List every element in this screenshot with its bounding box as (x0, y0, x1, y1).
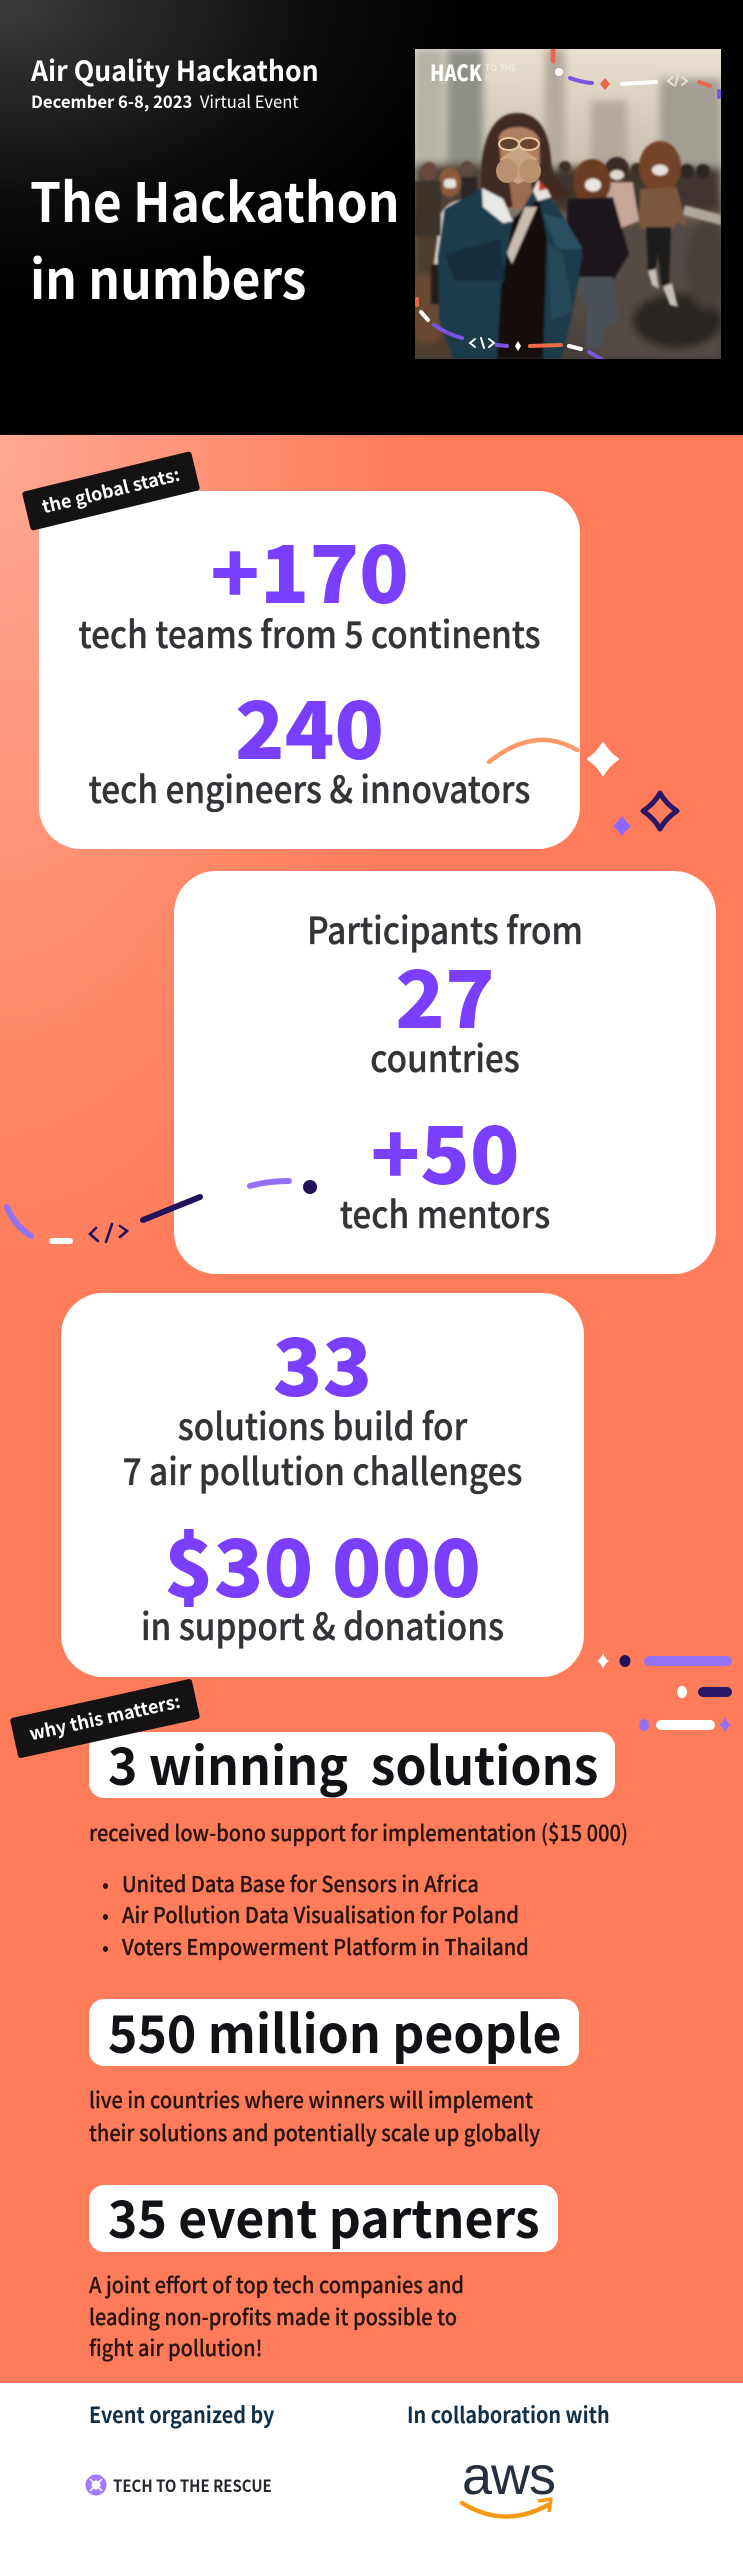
bullet (103, 1914, 108, 1920)
text: joint effort (88, 2268, 464, 2363)
list item: Poland: Air Pollution Data Visualisation for Poland (122, 1898, 519, 1930)
label: support and donations: in support & donations (141, 1597, 504, 1651)
label: tech engineers: tech engineers & innovators (89, 760, 530, 814)
label: solutions built: solutions build for (178, 1397, 467, 1451)
label: collaborator: In collaboration with (407, 2398, 610, 2430)
icon: lifebuoy ring (86, 2474, 106, 2496)
callout: 3 winning solutions (89, 1732, 615, 1798)
stat: 27: 27 (395, 936, 495, 1052)
wordmark: TECH TO THE RESCUE (113, 2473, 272, 2497)
tag: the global stats: the global stats: (39, 461, 182, 519)
main heading (30, 159, 400, 315)
text: where winners implement: live in countries where winners will implement (89, 2083, 533, 2115)
logo: Tech To The Rescue (86, 2473, 272, 2497)
photo logo: RESCUE (485, 73, 518, 83)
callout: 35 event partners (89, 2185, 558, 2252)
panel: global stats card 1 (39, 491, 580, 849)
icon: dashes near card 3 (597, 1653, 732, 1733)
coral stats background (0, 435, 743, 2383)
icon: dashes and code glyph by card 2 (7, 1180, 317, 1242)
callout: 550 million people (89, 1999, 579, 2066)
stat: 33: 33 (273, 1304, 372, 1420)
label: challenges: 7 air pollution challenges (123, 1442, 522, 1496)
label: countries: countries (370, 1029, 520, 1083)
photo logo: TO THE (485, 63, 517, 73)
event date and format: December 6-8, 2023 Virtual Event (31, 88, 299, 113)
list: winning solutions (103, 1867, 529, 1962)
text: where winners implement: their solutions and potentially scale up globally (89, 2116, 540, 2148)
main heading: The Hackathon (30, 159, 400, 238)
stat: +170: +170 (210, 511, 409, 627)
photo logo (432, 64, 518, 82)
text: joint effort: fight air pollution! (89, 2331, 263, 2363)
label: participants from: Participants from (307, 901, 583, 955)
logo: AWS (460, 2446, 555, 2519)
bullet (103, 1946, 108, 1952)
tag: why this matters (10, 1679, 200, 1758)
label: tech mentors: tech mentors (340, 1185, 550, 1239)
panel: participants card 2 (174, 871, 716, 1274)
heading text: 3 winning solutions (108, 1725, 598, 1800)
bullet (103, 1883, 108, 1889)
footer panel (0, 2383, 743, 2560)
event title: Air Quality Hackathon (31, 50, 319, 90)
stat: 240: 240 (235, 667, 384, 783)
icon: smile arrow (460, 2497, 553, 2519)
heading text: 550 million people (108, 1993, 561, 2068)
hero photo: woman in a respirator walking through smog (415, 49, 721, 359)
text: low-bono support: received low-bono support for implementation ($15 000) (89, 1816, 628, 1848)
icon: sparkles near card 1 (588, 743, 677, 836)
label: tech teams: tech teams from 5 continents (78, 605, 541, 659)
list item: Thailand: Voters Empowerment Platform in Thailand (122, 1930, 529, 1962)
text: joint effort: leading non-profits made it possible to (89, 2300, 457, 2332)
stat: +50: +50 (370, 1092, 520, 1208)
label: organizer: Event organized by (89, 2398, 274, 2430)
photo frame decoration (417, 49, 719, 359)
tag: why this matters: why this matters: (27, 1688, 183, 1746)
text: where winners implement (89, 2083, 540, 2148)
main heading: in numbers (30, 236, 306, 315)
text: joint effort: A joint effort of top tech companies and (89, 2268, 464, 2300)
header panel (0, 0, 743, 435)
wordmark: aws (462, 2446, 555, 2506)
stat: $30 000: $30 000 (164, 1505, 481, 1621)
tag: the global stats (22, 451, 200, 531)
list item: Africa: United Data Base for Sensors in Africa (122, 1867, 479, 1899)
icon: orange arc (489, 740, 577, 762)
photo logo: HACK (430, 56, 482, 88)
heading text: 35 event partners (108, 2178, 540, 2253)
panel: solutions card 3 (61, 1293, 584, 1677)
